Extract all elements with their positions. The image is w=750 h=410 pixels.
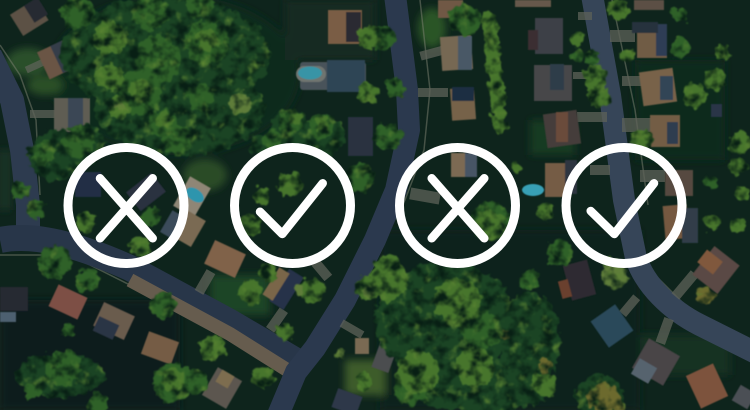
icon: check in circle 4 <box>566 148 682 264</box>
driveways <box>25 12 698 345</box>
icon: cross in circle 1 <box>68 148 184 264</box>
icon: cross in circle 3 <box>400 148 516 264</box>
icon: check in circle 2 <box>234 148 350 264</box>
